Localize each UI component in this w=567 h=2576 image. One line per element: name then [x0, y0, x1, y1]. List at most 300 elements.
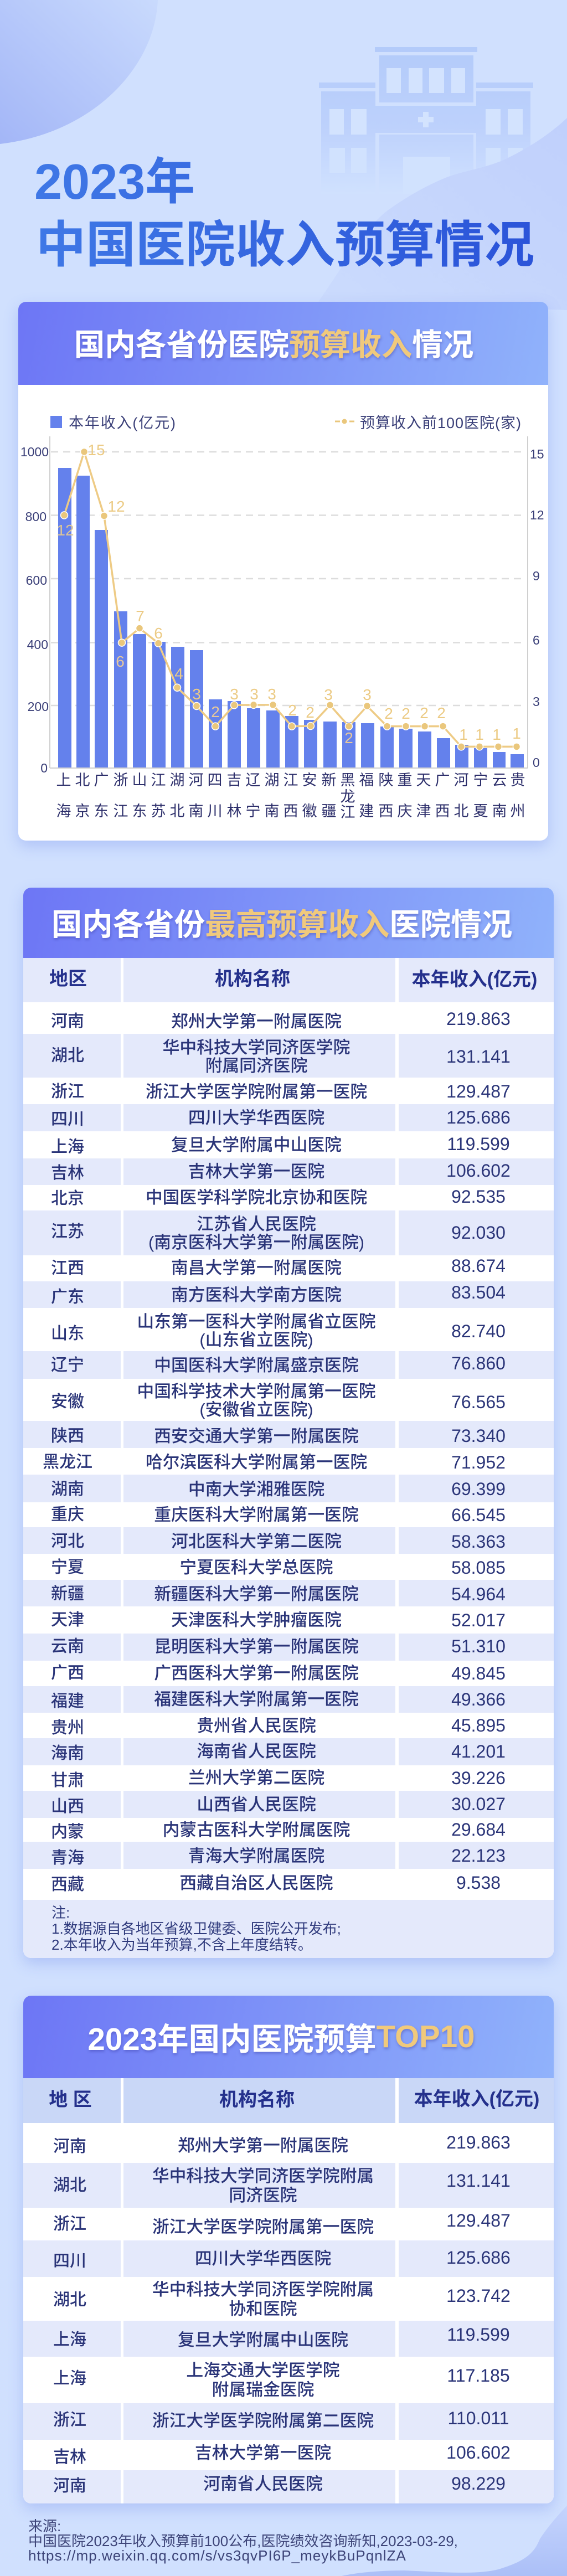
row: 江西: 南昌大学第一附属医院 — [171, 1258, 342, 1277]
left axis labels: 400 — [27, 637, 48, 652]
row: 北京: 中国医学科学院北京协和医院 — [146, 1187, 367, 1207]
row: 北京: 92.535 — [451, 1186, 506, 1206]
row: 云南 — [23, 1634, 554, 1661]
row: 浙江 — [23, 2208, 554, 2240]
row: 广西 — [23, 1661, 554, 1686]
row: 贵州 — [23, 1713, 554, 1738]
line data labels: 2 — [437, 704, 446, 722]
row: 福建: 福建医科大学附属第一医院 — [154, 1689, 359, 1709]
row: 西藏: 9.538 — [456, 1873, 501, 1893]
row: 山东: 山东第一医科大学附属省立医院 — [137, 1312, 376, 1331]
row: 陕西: 陕西 — [51, 1427, 84, 1445]
legend — [50, 415, 521, 431]
x axis province labels: 疆 — [321, 803, 337, 820]
row: 新疆 — [23, 1580, 554, 1606]
heading: provincial budget revenue: 国内各省份医院 情况 — [74, 328, 473, 362]
row: 吉林 — [23, 2440, 554, 2470]
row: 河南: 219.863 — [446, 1009, 511, 1029]
row: 四川 — [23, 2240, 554, 2277]
row: 宁夏 — [23, 1554, 554, 1580]
row: 上海: 复旦大学附属中山医院 — [171, 1135, 342, 1155]
row: 广西: 广西医科大学第一附属医院 — [154, 1663, 359, 1682]
bars: annual revenue by province — [58, 468, 524, 767]
row: 黑龙江: 71.952 — [451, 1452, 506, 1472]
row: 浙江: 浙江大学医学院附属第二医院 — [152, 2411, 374, 2430]
row: 河北: 58.363 — [451, 1532, 506, 1552]
row: 湖北 — [23, 2163, 554, 2208]
row: 吉林: 吉林 — [51, 1164, 84, 1182]
row: 安徽: (安徽省立医院) — [199, 1400, 313, 1419]
row: 甘肃 — [23, 1765, 554, 1791]
row: 海南 — [23, 1738, 554, 1765]
row: 内蒙: 29.684 — [451, 1820, 506, 1840]
row: 山西: 山西 — [51, 1797, 84, 1816]
icon: hospital building — [319, 47, 533, 194]
table header row: 机构名称 — [215, 968, 290, 989]
row: 甘肃: 甘肃 — [51, 1771, 84, 1790]
x axis province labels: 河 — [188, 772, 204, 789]
table header row: 本年收入(亿元) — [412, 969, 537, 990]
line data labels — [56, 441, 521, 746]
row: 福建: 福建 — [51, 1692, 84, 1710]
row: 上海 — [23, 1131, 554, 1158]
row: 安徽: 中国科学技术大学附属第一医院 — [137, 1382, 376, 1401]
x axis province labels: 津 — [416, 803, 431, 820]
row: 河南: 河南 — [53, 2476, 86, 2495]
title: 2023年 — [34, 154, 195, 210]
line data labels: 1 — [512, 725, 521, 742]
row: 江苏: 92.030 — [451, 1223, 506, 1243]
line data labels: 12 — [56, 522, 74, 539]
row: 湖北 — [23, 1034, 554, 1078]
heading: top 10 hospital budgets: 2023年国内医院预算 — [87, 2021, 377, 2057]
title: 中国医院收入预算情况 — [36, 218, 534, 273]
x axis province labels: 浙 — [113, 772, 128, 789]
table header row: 机构名称 — [219, 2089, 295, 2110]
x axis province labels: 上 — [56, 772, 71, 789]
heading: highest budget hospital per province — [23, 888, 554, 958]
x axis province labels: 西 — [435, 803, 450, 820]
row: 山西 — [23, 1791, 554, 1818]
row: 江西 — [23, 1255, 554, 1281]
x axis province labels: 湖 — [265, 772, 279, 789]
x axis province labels: 江 — [113, 803, 128, 820]
row: 上海: 复旦大学附属中山医院 — [178, 2330, 348, 2350]
row: 河南: 河南 — [51, 1012, 84, 1031]
row: 湖北: 123.742 — [446, 2286, 511, 2306]
row: 河南: 河南 — [53, 2137, 86, 2155]
x axis province labels: 吉 — [227, 772, 241, 789]
row: 广东: 83.504 — [451, 1282, 506, 1302]
row: 四川: 四川大学华西医院 — [195, 2248, 331, 2268]
x axis province labels: 江 — [284, 772, 298, 789]
line data labels: 3 — [250, 686, 259, 703]
row: 广西: 49.845 — [451, 1663, 506, 1683]
row: 湖南: 中南大学湘雅医院 — [188, 1480, 324, 1498]
row: 江西: 88.674 — [451, 1256, 506, 1276]
row: 贵州: 45.895 — [451, 1715, 506, 1735]
row: 山东: 山东 — [51, 1325, 84, 1342]
row: 上海: 119.599 — [447, 1134, 510, 1154]
row: 吉林: 吉林大学第一医院 — [188, 1162, 324, 1181]
row: 四川: 四川大学华西医院 — [188, 1108, 324, 1127]
row: 上海: 附属瑞金医院 — [212, 2380, 314, 2399]
row: 吉林: 106.602 — [446, 1161, 511, 1181]
row: 湖北: 湖北 — [53, 2291, 86, 2309]
row: 云南: 昆明医科大学第一附属医院 — [154, 1637, 359, 1656]
row: 四川 — [23, 1104, 554, 1131]
row: 天津: 天津医科大学肿瘤医院 — [171, 1610, 342, 1630]
x axis province labels: 湖 — [169, 772, 185, 789]
heading: top 10 hospital budgets: TOP10 — [377, 2019, 475, 2054]
row: 浙江: 129.487 — [446, 2211, 511, 2230]
line data labels: 3 — [363, 686, 372, 703]
x axis province labels: 陕 — [379, 772, 393, 789]
x axis province labels: 云 — [492, 772, 507, 789]
row: 山东: (山东省立医院) — [199, 1330, 313, 1349]
x axis province labels: 广 — [435, 772, 450, 789]
row: 上海: 上海 — [53, 2369, 86, 2388]
row: 辽宁: 76.860 — [451, 1353, 506, 1373]
x axis province labels: 东 — [132, 803, 147, 820]
line data labels: 2 — [384, 705, 393, 722]
table note: 1.数据源自各地区省级卫健委、医院公开发布; — [51, 1920, 341, 1937]
row: 海南: 海南 — [51, 1744, 84, 1763]
row: 宁夏: 宁夏医科大学总医院 — [179, 1558, 333, 1577]
right axis labels: 15 — [530, 447, 544, 461]
row: 重庆: 66.545 — [451, 1505, 506, 1525]
row: 山西: 30.027 — [451, 1794, 506, 1814]
row: 河南: 219.863 — [446, 2132, 511, 2152]
source note — [28, 2518, 458, 2564]
x axis province labels: 江 — [340, 804, 355, 821]
row: 福建: 49.366 — [451, 1689, 506, 1709]
row: 天津: 52.017 — [451, 1610, 506, 1630]
x axis province labels: 新 — [321, 772, 337, 789]
row: 浙江: 浙江 — [53, 2411, 86, 2429]
heading: highest budget hospital per province: 最高预算收入 — [205, 907, 389, 941]
row: 湖北: 华中科技大学同济医学院 — [163, 1038, 350, 1057]
line data labels: 4 — [174, 665, 183, 682]
table header row: 地 区 — [49, 2089, 92, 2110]
line data labels: 3 — [267, 686, 276, 703]
row: 四川: 四川 — [53, 2252, 86, 2270]
row: 内蒙: 内蒙 — [51, 1823, 84, 1841]
x axis province labels: 广 — [94, 772, 109, 789]
row: 宁夏: 58.085 — [451, 1558, 506, 1578]
row: 四川: 125.686 — [446, 2247, 511, 2267]
row: 青海: 22.123 — [451, 1846, 506, 1866]
left axis labels: 200 — [28, 699, 49, 714]
row: 上海: 上海交通大学医学院 — [186, 2361, 340, 2380]
row: 西藏: 西藏 — [51, 1875, 84, 1894]
row: 云南: 云南 — [51, 1637, 84, 1656]
row: 黑龙江: 黑龙江 — [43, 1453, 92, 1471]
left axis labels: 0 — [40, 761, 48, 775]
row: 新疆: 新疆医科大学第一附属医院 — [154, 1584, 359, 1604]
row: 湖北: 131.141 — [446, 1047, 511, 1067]
source note: https://mp.weixin.qq.com/s/vs3qvPI6P_meykBuPqnlZA — [28, 2547, 406, 2564]
line data labels: 2 — [211, 703, 220, 720]
row: 江苏 — [23, 1210, 554, 1255]
line data labels: 12 — [107, 498, 125, 515]
heading: highest budget hospital per province: 国内各省份 医院情况 — [51, 907, 512, 941]
row: 湖北: 华中科技大学同济医学院附属 — [152, 2279, 374, 2299]
x axis province labels: 辽 — [246, 772, 260, 789]
row: 河南: 河南省人民医院 — [203, 2474, 323, 2493]
row: 甘肃: 39.226 — [451, 1768, 506, 1787]
line data labels: 3 — [192, 686, 201, 703]
source note: 中国医院2023年收入预算前100公布,医院绩效咨询新知,2023-03-29, — [28, 2533, 458, 2549]
row: 陕西: 73.340 — [451, 1426, 506, 1446]
row: 安徽: 76.565 — [451, 1392, 506, 1412]
source note: 来源: — [28, 2518, 61, 2534]
row: 重庆: 重庆医科大学附属第一医院 — [154, 1505, 359, 1524]
row: 湖北 — [23, 2277, 554, 2321]
row: 北京: 北京 — [51, 1189, 84, 1207]
x axis province labels: 江 — [151, 772, 166, 789]
right axis labels: 6 — [533, 633, 540, 647]
row: 天津 — [23, 1606, 554, 1634]
table header row: 地区 — [49, 968, 87, 989]
x axis province labels: 北 — [454, 803, 468, 820]
row: 河南: 郑州大学第一附属医院 — [178, 2135, 348, 2155]
table header row: 本年收入(亿元) — [414, 2089, 539, 2110]
x axis province labels: 南 — [265, 803, 279, 820]
x axis province labels: 西 — [284, 803, 298, 820]
row: 河南 — [23, 2470, 554, 2503]
row: 吉林 — [23, 1158, 554, 1185]
row: 上海 — [23, 2357, 554, 2403]
line data labels: 2 — [288, 702, 297, 719]
row: 浙江: 浙江 — [51, 1082, 84, 1101]
row: 宁夏: 宁夏 — [51, 1558, 84, 1576]
right axis labels — [530, 447, 544, 770]
table note — [23, 1900, 554, 1958]
x axis province labels: 川 — [207, 803, 223, 820]
row: 黑龙江: 哈尔滨医科大学附属第一医院 — [146, 1452, 367, 1472]
row: 湖南: 湖南 — [51, 1480, 84, 1498]
x axis province labels: 南 — [188, 803, 204, 820]
x axis province labels: 南 — [492, 803, 507, 820]
x axis province labels: 北 — [75, 772, 90, 789]
row: 四川: 四川 — [51, 1110, 84, 1129]
row: 福建 — [23, 1686, 554, 1713]
table note: 2.本年收入为当年预算,不含上年度结转。 — [51, 1936, 312, 1953]
chart: revenue bars and top-100 hospital count line — [20, 415, 544, 821]
row: 青海 — [23, 1842, 554, 1869]
x axis province labels: 天 — [416, 772, 431, 789]
x axis province labels: 黑 — [340, 772, 355, 789]
x axis province labels: 东 — [94, 803, 109, 820]
row: 海南: 海南省人民医院 — [197, 1742, 316, 1761]
row: 甘肃: 兰州大学第二医院 — [188, 1768, 324, 1787]
x axis province labels: 安 — [302, 772, 317, 789]
x axis province labels: 四 — [207, 772, 223, 789]
row: 辽宁: 中国医科大学附属盛京医院 — [154, 1356, 359, 1374]
x axis province labels: 山 — [132, 772, 147, 789]
x axis province labels: 夏 — [473, 803, 488, 820]
row: 山东: 82.740 — [451, 1321, 506, 1341]
line data labels: 7 — [136, 607, 145, 625]
x axis province labels: 西 — [379, 803, 393, 820]
x axis province labels: 宁 — [473, 772, 488, 789]
panel: top 10 hospital budgets table — [23, 1996, 554, 2503]
panel: highest budget hospital per province table — [23, 888, 554, 1958]
right axis labels: 3 — [533, 694, 540, 709]
row: 青海: 青海大学附属医院 — [188, 1846, 324, 1866]
row: 湖北: 附属同济医院 — [205, 1055, 307, 1075]
title — [34, 154, 534, 273]
x axis province labels: 徽 — [302, 803, 317, 820]
row: 江苏: 江苏省人民医院 — [197, 1214, 316, 1234]
row: 广东: 南方医科大学南方医院 — [171, 1285, 342, 1305]
row: 浙江 — [23, 1078, 554, 1104]
x axis province labels: 庆 — [398, 803, 412, 820]
row: 浙江: 110.011 — [448, 2408, 509, 2428]
row: 江西: 江西 — [51, 1259, 84, 1277]
line data labels: 6 — [154, 625, 163, 642]
row: 广西: 广西 — [51, 1663, 84, 1682]
row: 陕西: 西安交通大学第一附属医院 — [154, 1426, 359, 1446]
x axis province labels: 贵 — [511, 772, 525, 789]
row: 重庆: 重庆 — [51, 1506, 84, 1524]
left axis labels: 1000 — [20, 445, 49, 459]
row: 浙江: 浙江大学医学院附属第一医院 — [146, 1082, 367, 1101]
table header row — [23, 2078, 554, 2123]
row: 北京 — [23, 1185, 554, 1210]
x axis province labels: 宁 — [246, 803, 260, 820]
row: 西藏: 西藏自治区人民医院 — [179, 1873, 333, 1893]
row: 上海: 119.599 — [447, 2325, 510, 2345]
x axis province labels: 州 — [511, 803, 525, 820]
row: 青海: 青海 — [51, 1849, 84, 1867]
row: 广东 — [23, 1281, 554, 1308]
row: 浙江: 浙江大学医学院附属第一医院 — [152, 2217, 374, 2237]
row: 湖北: 华中科技大学同济医学院附属 — [152, 2166, 374, 2185]
x axis province labels — [56, 772, 525, 821]
row: 广东: 广东 — [51, 1288, 84, 1306]
line data labels: 2 — [306, 704, 315, 721]
row: 湖北: 协和医院 — [229, 2299, 297, 2318]
line data labels: 3 — [230, 686, 239, 703]
row: 上海 — [23, 2321, 554, 2357]
row: 天津: 天津 — [51, 1611, 84, 1629]
line data labels: 1 — [475, 726, 484, 743]
right axis labels: 9 — [533, 569, 540, 583]
row: 湖北: 131.141 — [446, 2171, 511, 2191]
row: 吉林: 吉林大学第一医院 — [195, 2443, 331, 2462]
row: 河南: 郑州大学第一附属医院 — [171, 1012, 342, 1031]
heading: provincial budget revenue — [18, 302, 548, 385]
row: 上海: 117.185 — [447, 2366, 510, 2386]
line data labels: 2 — [401, 705, 410, 722]
left axis labels: 800 — [25, 509, 47, 524]
right axis labels: 12 — [530, 508, 544, 522]
left axis labels — [20, 445, 49, 775]
x axis province labels: 福 — [359, 772, 374, 789]
x axis province labels: 苏 — [151, 803, 166, 820]
row: 河北: 河北医科大学第二医院 — [171, 1532, 342, 1550]
row: 上海: 上海 — [53, 2331, 86, 2349]
x axis province labels: 河 — [454, 772, 468, 789]
row: 吉林: 吉林 — [53, 2448, 86, 2466]
row: 辽宁: 辽宁 — [51, 1356, 84, 1374]
line data labels: 1 — [459, 726, 468, 743]
row: 吉林: 106.602 — [446, 2443, 511, 2462]
row: 安徽 — [23, 1379, 554, 1421]
heading: top 10 hospital budgets — [23, 1996, 554, 2078]
line data labels: 15 — [87, 441, 105, 458]
row: 河南 — [23, 1002, 554, 1034]
row: 新疆: 54.964 — [451, 1584, 506, 1604]
line data labels: 6 — [116, 653, 125, 670]
row: 湖南: 69.399 — [451, 1478, 506, 1498]
row: 辽宁 — [23, 1351, 554, 1379]
row: 湖北: 同济医院 — [229, 2185, 297, 2205]
line data labels: 2 — [344, 729, 353, 746]
row: 河北 — [23, 1527, 554, 1554]
row: 江苏: (南京医科大学第一附属医院) — [148, 1233, 364, 1251]
line: hospitals in top 100 — [61, 449, 520, 750]
row: 新疆: 新疆 — [51, 1585, 84, 1603]
row: 浙江 — [23, 2403, 554, 2440]
row: 贵州: 贵州 — [51, 1719, 84, 1737]
row: 四川: 125.686 — [446, 1107, 511, 1127]
row: 内蒙 — [23, 1818, 554, 1842]
x axis province labels: 海 — [56, 803, 71, 820]
x axis province labels: 北 — [169, 803, 185, 820]
line data labels: 2 — [420, 704, 429, 722]
row: 上海: 上海 — [51, 1138, 84, 1156]
row: 湖南 — [23, 1475, 554, 1502]
row: 河南 — [23, 2123, 554, 2163]
row: 河北: 河北 — [51, 1532, 84, 1550]
row: 山东 — [23, 1308, 554, 1351]
row: 重庆 — [23, 1502, 554, 1527]
table note: 注: — [51, 1904, 70, 1921]
line data labels: 3 — [324, 686, 333, 703]
right axis labels: 0 — [533, 755, 540, 770]
row: 浙江: 浙江 — [53, 2215, 86, 2233]
row: 西藏 — [23, 1869, 554, 1900]
line data labels: 1 — [492, 726, 501, 743]
row: 湖北: 湖北 — [51, 1047, 84, 1065]
row: 内蒙: 内蒙古医科大学附属医院 — [163, 1820, 350, 1840]
panel: provincial budget revenue chart — [18, 302, 548, 841]
x axis province labels: 龙 — [340, 789, 355, 805]
row: 安徽: 安徽 — [51, 1392, 84, 1411]
x axis province labels: 京 — [75, 803, 90, 820]
row: 江苏: 江苏 — [51, 1223, 84, 1241]
heading: provincial budget revenue: 预算收入 — [289, 328, 412, 362]
row: 海南: 41.201 — [451, 1742, 506, 1761]
x axis province labels: 林 — [227, 803, 241, 820]
row: 黑龙江 — [23, 1448, 554, 1475]
row: 山西: 山西省人民医院 — [197, 1795, 316, 1814]
row: 浙江: 129.487 — [446, 1081, 511, 1101]
row: 陕西 — [23, 1421, 554, 1448]
row: 贵州: 贵州省人民医院 — [197, 1715, 316, 1735]
x axis province labels: 重 — [398, 772, 412, 789]
left axis labels: 600 — [26, 573, 47, 588]
legend: 预算收入前100医院(家) — [360, 415, 521, 431]
x axis province labels: 建 — [359, 803, 374, 820]
legend: 本年收入(亿元) — [69, 415, 176, 431]
table header row — [23, 958, 554, 1002]
row: 河南: 98.229 — [451, 2473, 506, 2493]
row: 湖北: 湖北 — [53, 2176, 86, 2194]
